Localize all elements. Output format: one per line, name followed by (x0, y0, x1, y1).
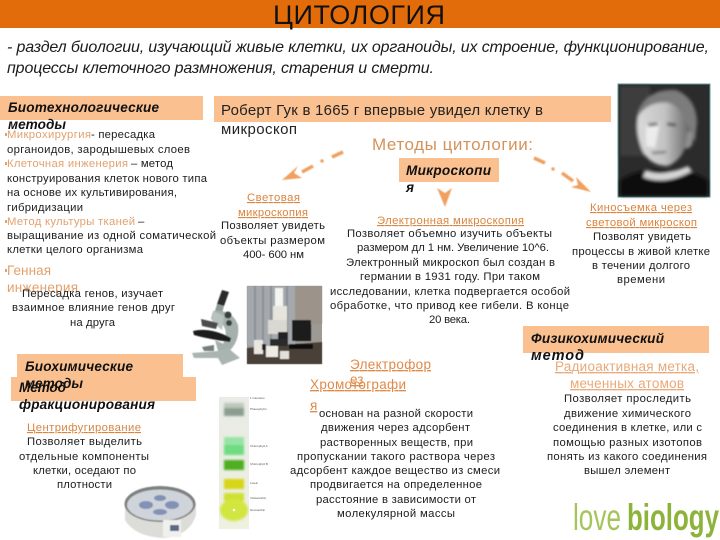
chromatography band labels: Neoxanthin (250, 508, 266, 512)
text block: chromatography: основан на разной скорости (319, 408, 473, 420)
text block: chromatography: расстояние в зависимости от (316, 494, 476, 506)
header bar with title (0, 0, 720, 30)
heading: biotechnological methods (0, 96, 203, 132)
list of biotechnological methods: Клеточная инженерия (7, 158, 128, 170)
list of biotechnological methods (5, 129, 216, 256)
heading link: chromatography: я (310, 398, 317, 413)
logo: lovebiology (573, 497, 719, 538)
text block: electron microscopy (330, 215, 570, 326)
text block: radioactive label: понять из какого соединения (547, 451, 707, 463)
text block: radioactive label (547, 359, 707, 477)
icon: centrifuge (124, 486, 196, 538)
heading link: electrophoresis: ез (350, 372, 363, 387)
text block: radioactive label: соединения в клетке, или с (553, 422, 702, 434)
text block: radioactive label: меченных атомов (570, 376, 684, 391)
text block: chromatography: движения через адсорбент (321, 422, 470, 434)
text block: radioactive label: вышел элемент (584, 465, 670, 477)
definition text: процессы клеточного размножения, старения и смерти. (7, 60, 434, 77)
heading: microscopy: Микроскопи (406, 163, 492, 178)
text block: radioactive label: Радиоактивная метка, (555, 359, 699, 374)
text block: centrifugation: клетки, оседают по (33, 465, 136, 477)
text block: electron microscopy: 20 века. (429, 314, 470, 326)
gene engineering: Генная (7, 263, 51, 278)
list of biotechnological methods: Метод культуры тканей (7, 216, 135, 228)
text block: time-lapse microscopy (572, 202, 710, 286)
text block: light microscopy: Световая (247, 192, 300, 204)
text block: centrifugation: Центрифугирование (27, 422, 141, 434)
text block: time-lapse microscopy: Позволят увидеть (593, 231, 691, 243)
arrow: to electron microscopy (437, 188, 452, 207)
text block: centrifugation (19, 422, 149, 491)
text block: time-lapse microscopy: в течении долгого (592, 260, 690, 272)
heading: fractionation method: Метод (19, 380, 66, 395)
list of biotechnological methods: – (138, 216, 145, 228)
gene engineering: на друга (70, 317, 116, 329)
text block: electron microscopy: германии в 1931 году. При таком (360, 271, 540, 283)
chromatography band labels: Lutein (250, 481, 259, 485)
heading: biochemical methods: методы (25, 376, 83, 391)
text block: electron microscopy: размером дл 1 нм. Увеличение 10^6. (357, 242, 549, 254)
text block: light microscopy: объекты размером (220, 235, 325, 247)
icon: light microscope (192, 290, 240, 365)
heading link: electrophoresis (350, 357, 431, 387)
panel: physicochemical method (523, 326, 709, 477)
photo: electron microscope (247, 286, 322, 364)
gene engineering: взаимное влияние генов друг (12, 302, 175, 314)
text block: chromatography: молекулярной массы (337, 508, 455, 520)
heading: physicochemical method (523, 326, 709, 364)
banner: Robert Hooke (214, 96, 611, 138)
list of biotechnological methods: на основе их культивирования, (7, 187, 177, 199)
chromatography band labels (250, 396, 268, 512)
gene engineering (5, 263, 175, 329)
heading link: chromatography (310, 377, 406, 413)
text block: chromatography: продвигается на определенное (310, 479, 482, 491)
definition text: - раздел биологии, изучающий живые клетки, их органоиды, их строение, функционирование, (7, 39, 709, 56)
heading: biochemical methods (11, 354, 196, 401)
panel: biotechnological methods (0, 96, 216, 329)
arrow: to time-lapse filming (534, 158, 591, 192)
gene engineering: Пересадка генов, изучает (22, 288, 163, 300)
text block: light microscopy (220, 192, 325, 261)
text block: chromatography: адсорбент каждое вещество из смеси (290, 465, 500, 477)
chromatography band labels: Phaeophytin (250, 407, 267, 411)
text block: chromatography (290, 408, 500, 520)
heading: fractionation method (19, 380, 155, 412)
chart: chromatography strip (219, 396, 268, 529)
text block: time-lapse microscopy: процессы в живой клетке (572, 246, 710, 258)
list of biotechnological methods: выращивание из одной соматической (7, 230, 216, 242)
text block: light microscopy: 400- 600 нм (243, 249, 304, 261)
heading link: chromatography: Хромотографи (310, 377, 406, 392)
chromatography band labels: Violaxanthin (250, 496, 267, 500)
heading: microscopy: я (405, 180, 414, 195)
text block: electron microscopy: Позволяет объемно изучить объекты (347, 228, 552, 240)
text block: centrifugation: отдельные компоненты (19, 451, 149, 463)
list of biotechnological methods: - пересадка (91, 129, 156, 141)
text block: radioactive label: помощью разных изотопов (553, 437, 702, 449)
heading: microscopy (399, 158, 499, 195)
text block: electron microscopy: Электронный микроскоп был создан в (346, 257, 555, 269)
chromatography band labels: 1 Carotene (250, 396, 265, 400)
heading: cytology methods: Методы цитологии: (372, 135, 533, 154)
text block: time-lapse microscopy: Киносъемка через (590, 202, 692, 214)
text block: radioactive label: Позволяет проследить (564, 393, 691, 405)
list of biotechnological methods: – метод (131, 158, 173, 170)
banner: Robert Hooke: Роберт Гук в 1665 г впервые увидел клетку в (221, 102, 543, 119)
text block: electron microscopy: Электронная микроскопия (377, 215, 524, 227)
heading: physicochemical method: Физикохимический (531, 331, 665, 346)
text block: centrifugation: Позволяет выделить (27, 436, 142, 448)
text block: light microscopy: микроскопия (238, 207, 308, 219)
text block: electron microscopy: обработке, что привод кее гибели. В конце (330, 300, 569, 312)
heading: biotechnological methods: методы (8, 117, 66, 132)
heading: biotechnological methods: Биотехнологические (8, 100, 159, 115)
list of biotechnological methods: органоидов, зародышевых слоев (7, 144, 190, 156)
heading: fractionation method: фракционирования (19, 397, 155, 412)
text block: centrifugation: плотности (57, 479, 112, 491)
text block: time-lapse microscopy: времени (617, 274, 665, 286)
banner: Robert Hooke: микроскоп (221, 121, 297, 138)
gene engineering: инженерия (7, 280, 78, 295)
chromatography band labels: Chlorophyll A (250, 444, 268, 448)
heading link: electrophoresis: Электрофор (350, 357, 431, 372)
arrow: to light microscopy (282, 152, 343, 180)
text block: time-lapse microscopy: световой микроскоп (586, 217, 697, 229)
text block: radioactive label: движение химического (564, 408, 691, 420)
heading: physicochemical method: метод (531, 348, 584, 364)
list of biotechnological methods: Микрохирургия (7, 129, 91, 141)
text block: chromatography: пропускании такого раствора через (297, 451, 495, 463)
chromatography band labels: Chlorophyll B (250, 462, 268, 466)
portrait of Robert Hooke (618, 84, 710, 197)
list of biotechnological methods: гибридизации (7, 202, 83, 214)
header bar with title: ЦИТОЛОГИЯ (273, 0, 445, 30)
list of biotechnological methods: конструирования клеток нового типа (7, 173, 208, 185)
text block: electron microscopy: исследовании, клетка подвергается особой (330, 286, 570, 298)
text block: light microscopy: Позволяет увидеть (221, 220, 325, 232)
logo: lovebiology: love (573, 497, 621, 538)
text block: chromatography: растворенных веществ, при (320, 437, 473, 449)
heading: biochemical methods: Биохимические (25, 359, 133, 374)
definition text (7, 39, 709, 77)
list of biotechnological methods: клетки целого организма (7, 244, 144, 256)
panel: biochemical methods (11, 354, 196, 491)
